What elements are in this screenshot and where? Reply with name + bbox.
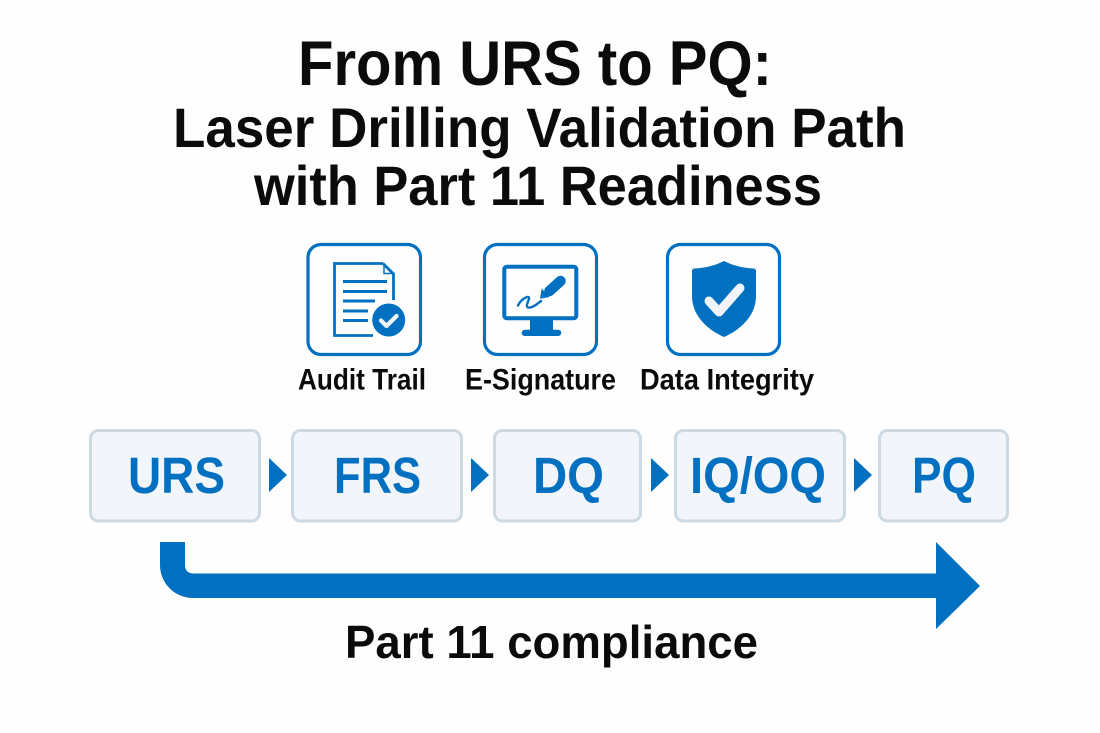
step: URS [90, 430, 260, 521]
caption: Part 11 compliance: Part 11 compliance [345, 616, 758, 668]
icon: audit trail [308, 244, 420, 354]
label: data integrity: Data Integrity [640, 364, 814, 396]
label: audit trail: Audit Trail [298, 364, 426, 396]
title [173, 29, 906, 217]
step: FRS [292, 430, 462, 521]
icon: data integrity [668, 244, 780, 354]
arrow: Part 11 compliance path [160, 542, 980, 629]
arrow: FRS to DQ [471, 458, 489, 492]
step: URS: URS [128, 447, 225, 504]
step: IQ/OQ [676, 430, 844, 521]
step: IQ/OQ: IQ/OQ [690, 447, 826, 504]
step: FRS: FRS [334, 447, 421, 504]
arrow: URS to FRS [269, 458, 287, 492]
arrow: DQ to IQ/OQ [651, 458, 669, 492]
icon: e-signature [484, 244, 596, 354]
arrow: IQ/OQ to PQ [854, 458, 872, 492]
step: DQ [494, 430, 640, 521]
title: From URS to PQ: [298, 29, 772, 99]
title: Laser Drilling Validation Path [173, 96, 906, 159]
label: e-signature: E-Signature [465, 364, 616, 396]
title: with Part 11 Readiness [253, 154, 822, 217]
step: PQ: PQ [912, 447, 976, 504]
step: PQ [880, 430, 1008, 521]
step: DQ: DQ [533, 447, 604, 504]
